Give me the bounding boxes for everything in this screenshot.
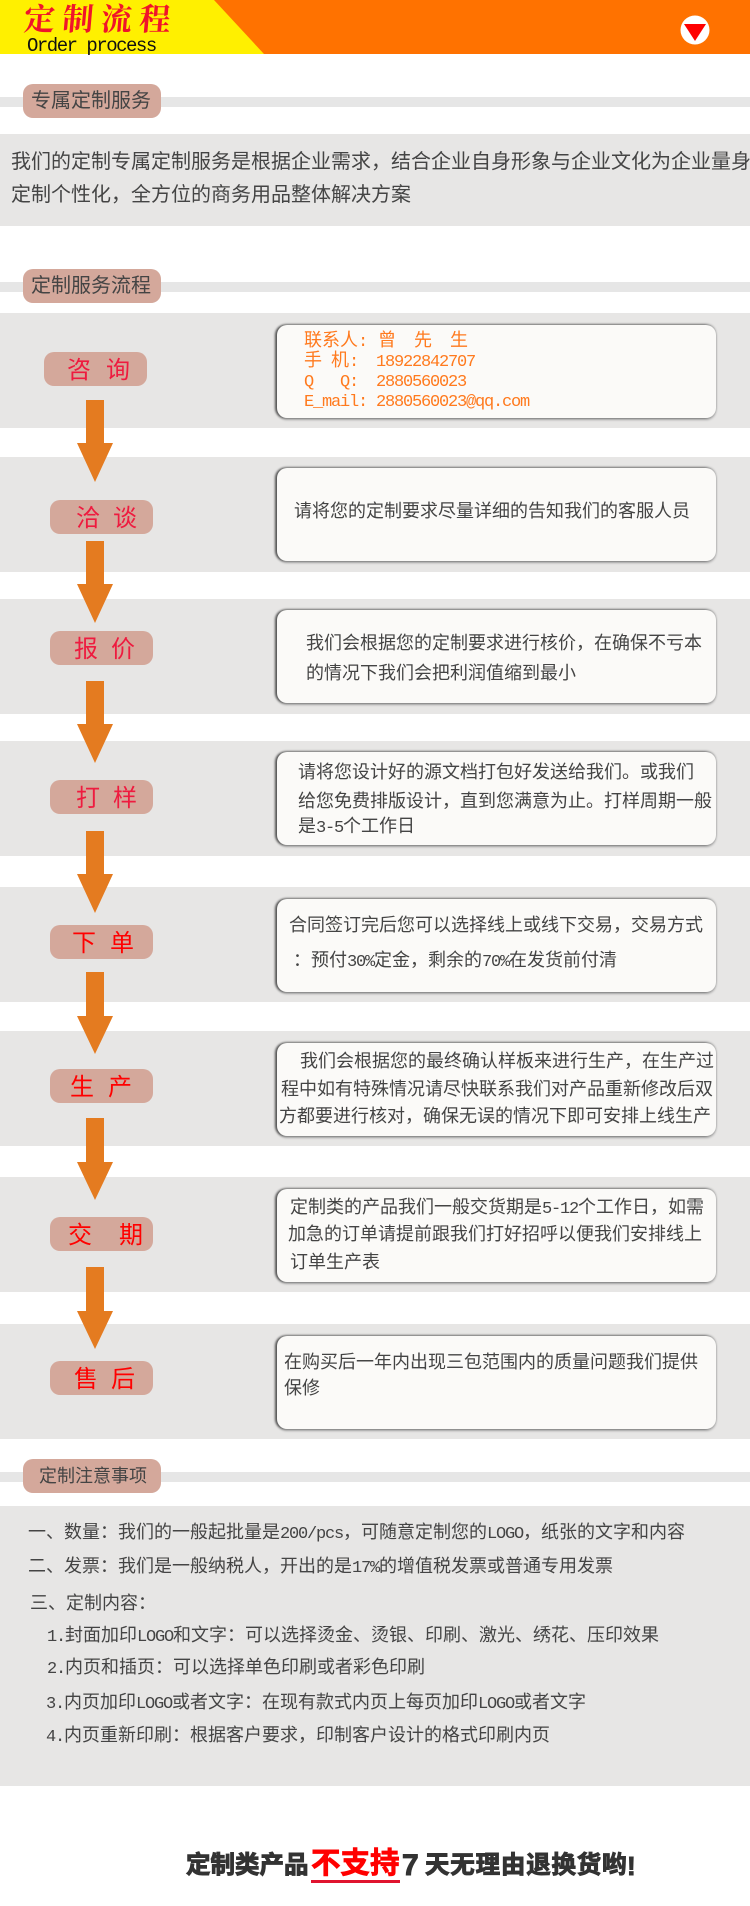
note 3: content heading: 三、定制内容： [30, 1593, 156, 1613]
panel: service intro [0, 134, 750, 226]
step 6 label: 生产: 产 [108, 1074, 132, 1101]
step 8 label: 售后: 售 [74, 1366, 98, 1393]
note 1: quantity: 一、数量：我们的一般起批量是200/pcs，可随意定制您的LOGO，纸张的文字和内容 [28, 1522, 685, 1544]
card 8 line 2: 保修 [284, 1378, 320, 1398]
card 5 line 2: ：预付30%定金，剩余的70%在发货前付清 [293, 950, 617, 972]
step 2 label: 洽谈: 洽 [76, 505, 100, 532]
card 5 line 1: 合同签订完后您可以选择线上或线下交易，交易方式 [289, 915, 703, 935]
arrow 2 [77, 541, 113, 623]
header banner [0, 0, 750, 54]
QQ: Q Q: 2880560023 [304, 373, 466, 392]
intro text line 1: 我们的定制专属定制服务是根据企业需求，结合企业自身形象与企业文化为企业量身 [11, 151, 750, 173]
title: 定制流程: 定制流程 [23, 2, 180, 37]
section heading: 专属定制服务 [0, 84, 750, 118]
card 7 line 1: 定制类的产品我们一般交货期是5-12个工作日，如需 [290, 1197, 704, 1219]
step 3 label: 报价: 报 [74, 636, 98, 663]
step band 1 [0, 313, 750, 428]
card 7 line 3: 订单生产表 [290, 1252, 380, 1272]
phone: 手 机: 18922842707 [304, 350, 475, 372]
card 2 [277, 468, 716, 561]
contact person: 联系人: [304, 330, 367, 352]
card 7 [277, 1189, 716, 1282]
card 2 text: 请将您的定制要求尽量详细的告知我们的客服人员 [294, 501, 690, 521]
panel: notes [0, 1506, 750, 1786]
step 1 label: 咨询: 询 [106, 357, 130, 384]
card 6 [277, 1043, 716, 1136]
footer seven: 7 [402, 1849, 419, 1882]
step 4 label: 打样: 打 [76, 785, 100, 812]
contact name: 曾 先 生 [378, 330, 468, 350]
footer exclamation: ! [627, 1851, 636, 1881]
step 2 label: 洽谈: 谈 [113, 505, 137, 532]
footer highlight: 不支持: 不支持 [311, 1847, 400, 1880]
highlight underline [311, 1880, 400, 1883]
step 4 label: 打样 [50, 780, 153, 814]
card 4 [277, 752, 716, 845]
card 6 line 1: 我们会根据您的最终确认样板来进行生产，在生产过 [300, 1051, 714, 1071]
step band 7 [0, 1177, 750, 1292]
card 3 [277, 610, 716, 703]
note 3.1: 1.封面加印LOGO和文字：可以选择烫金、烫银、印刷、激光、绣花、压印效果 [47, 1625, 659, 1647]
card 4 line 2: 给您免费排版设计，直到您满意为止。打样周期一般 [298, 791, 712, 811]
card 4 line 1: 请将您设计好的源文档打包好发送给我们。或我们 [298, 762, 694, 782]
card 8 line 1: 在购买后一年内出现三包范围内的质量问题我们提供 [284, 1352, 698, 1372]
step band 2 [0, 457, 750, 572]
step 1 label: 咨询 [44, 352, 147, 386]
note 3.4: 4.内页重新印刷：根据客户要求，印制客户设计的格式印刷内页 [46, 1725, 550, 1747]
step 1 label: 咨询: 咨 [67, 357, 91, 384]
note 3.2: 2.内页和插页：可以选择单色印刷或者彩色印刷 [47, 1657, 425, 1679]
step 3 label: 报价 [50, 631, 153, 665]
intro text line 2: 定制个性化，全方位的商务用品整体解决方案 [11, 184, 411, 206]
section heading: 定制注意事项: 定制注意事项 [39, 1466, 147, 1486]
note 2: invoice: 二、发票：我们是一般纳税人，开出的是17%的增值税发票或普通专用发票 [28, 1556, 613, 1578]
section heading: 专属定制服务: 专属定制服务 [31, 90, 151, 112]
email: E_mail: 2880560023@qq.com [304, 393, 529, 412]
section heading: 定制服务流程: 定制服务流程 [31, 275, 151, 297]
step 5 label: 下单 [50, 925, 153, 959]
card 4 line 3: 是3-5个工作日 [298, 816, 415, 838]
arrow 3 [77, 681, 113, 763]
arrow 5 [77, 972, 113, 1054]
step 8 label: 售后: 后 [111, 1366, 135, 1393]
section heading: 定制注意事项 [0, 1459, 750, 1493]
step 7 label: 交期: 交 [68, 1222, 92, 1249]
step band 6 [0, 1031, 750, 1146]
note 3.3: 3.内页加印LOGO或者文字：在现有款式内页上每页加印LOGO或者文字 [46, 1692, 586, 1714]
card 3 line 2: 的情况下我们会把利润值缩到最小 [306, 663, 576, 683]
footer notice [186, 1847, 636, 1883]
step band 8 [0, 1324, 750, 1439]
card 7 line 2: 加急的订单请提前跟我们打好招呼以便我们安排线上 [288, 1224, 702, 1244]
step 2 label: 洽谈 [50, 500, 153, 534]
step 6 label: 生产: 生 [70, 1074, 94, 1101]
arrow 6 [77, 1118, 113, 1200]
step band 3 [0, 599, 750, 714]
step 7 label: 交期: 期 [119, 1222, 143, 1249]
step band 4 [0, 741, 750, 856]
arrow 4 [77, 831, 113, 913]
yellow title block [0, 0, 264, 54]
footer text left: 定制类产品 [186, 1852, 308, 1879]
step 7 label: 交期 [50, 1217, 153, 1251]
arrow 7 [77, 1267, 113, 1349]
section heading: 定制服务流程 [0, 269, 750, 303]
footer text right: 天无理由退换货哟 [425, 1852, 627, 1879]
card 5 [277, 899, 716, 992]
step 5 label: 下单: 单 [110, 930, 134, 957]
step 5 label: 下单: 下 [72, 930, 96, 957]
arrow 1 [77, 400, 113, 482]
card 3 line 1: 我们会根据您的定制要求进行核价，在确保不亏本 [306, 633, 702, 653]
step 6 label: 生产 [50, 1069, 153, 1103]
card 8 [277, 1336, 716, 1429]
icon: down arrow badge [680, 16, 710, 44]
step 8 label: 售后 [50, 1361, 153, 1395]
card 6 line 3: 方都要进行核对，确保无误的情况下即可安排上线生产 [279, 1106, 711, 1126]
step 4 label: 打样: 样 [113, 785, 137, 812]
step 3 label: 报价: 价 [111, 636, 135, 663]
subtitle: Order process: Order process [27, 35, 156, 57]
card 6 line 2: 程中如有特殊情况请尽快联系我们对产品重新修改后双 [281, 1079, 713, 1099]
card 1: contact details [277, 325, 716, 418]
step band 5 [0, 887, 750, 1002]
